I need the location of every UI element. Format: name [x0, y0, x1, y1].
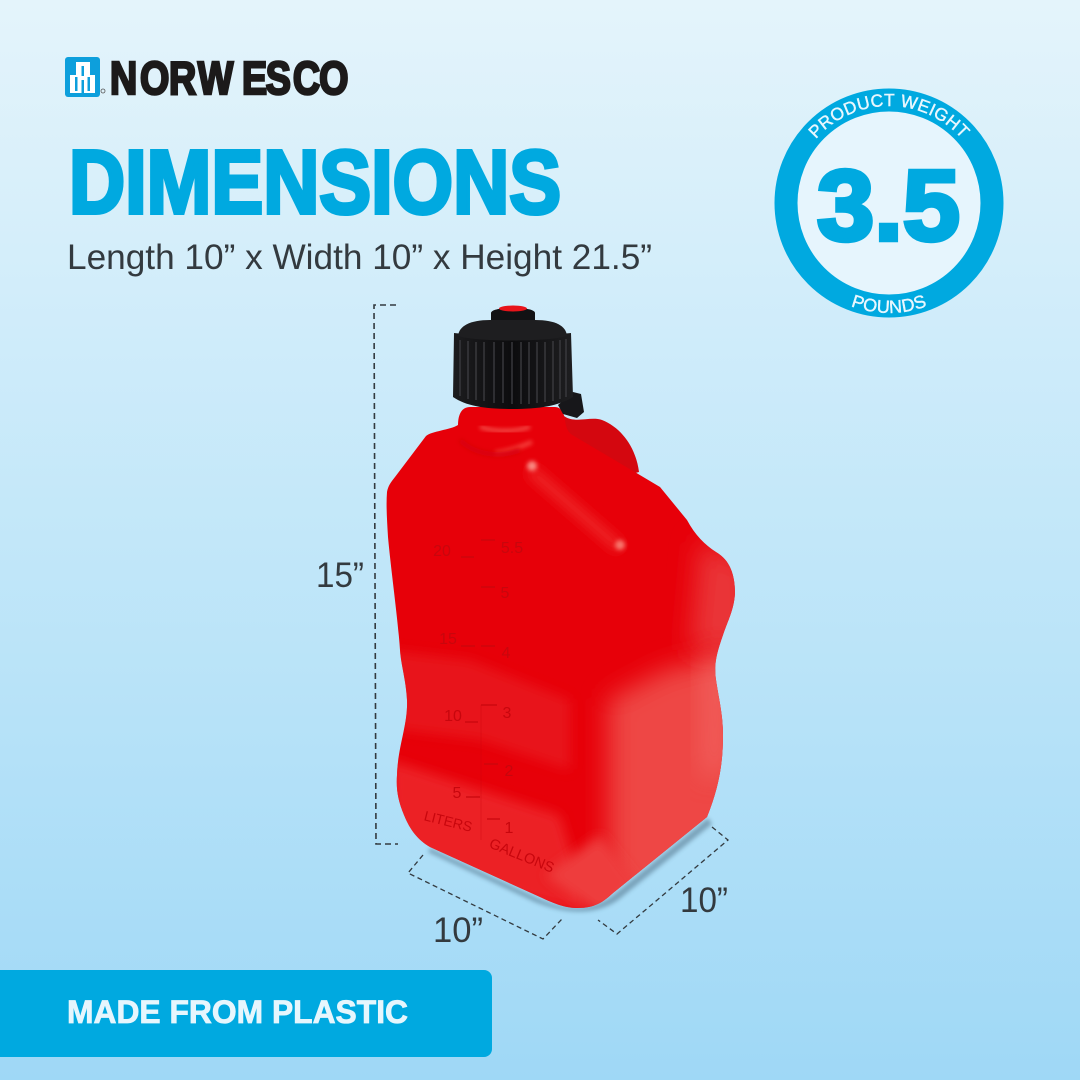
front waist band [400, 652, 570, 767]
jug measurement markings: 5 [501, 585, 510, 602]
subtitle: overall dimensions: Length 10” x Width 10” x Height 21.5” [67, 238, 652, 277]
side highlight [702, 650, 730, 780]
right side lower panel [593, 649, 723, 898]
jug measurement markings: 10 [444, 708, 462, 725]
cap latch [558, 392, 584, 418]
badge ring [786, 100, 992, 306]
jug measurement markings: GALLONS [487, 836, 556, 877]
jug measurement markings: 2 [505, 763, 514, 780]
callout text: MADE FROM PLASTIC [67, 994, 408, 1030]
dimension label: side width: 10” [680, 881, 728, 920]
cap top [458, 320, 567, 340]
badge unit label: POUNDS [852, 294, 926, 314]
jug measurement markings: 20 [433, 543, 451, 560]
bottom corner [548, 833, 634, 908]
dimension label: height: 15” [316, 556, 364, 595]
logo: Norwesco [65, 52, 348, 104]
jug measurement markings: 15 [439, 631, 457, 648]
jug measurement markings: 5.5 [501, 540, 523, 557]
neck highlight [480, 427, 530, 431]
dimension line: side width [598, 827, 728, 934]
logo wordmark: NORWESCO [110, 52, 348, 104]
product: red jug [380, 306, 750, 925]
jug measurement markings: LITERS [422, 807, 474, 835]
cap ribs [460, 339, 566, 404]
jug measurement markings: 1 [505, 820, 514, 837]
front bottom band [390, 760, 590, 915]
title: DIMENSIONS [69, 133, 561, 233]
jug measurement markings: 4 [502, 645, 511, 662]
jug handle [564, 416, 639, 480]
cap nozzle [491, 308, 535, 330]
cap nozzle red tip [499, 306, 527, 312]
neck shadow [460, 440, 520, 454]
badge top label: PRODUCT WEIGHT [808, 94, 971, 138]
jug measurement markings [422, 540, 556, 877]
jug measurement markings: 5 [453, 785, 462, 802]
icon: logo mark [65, 57, 105, 97]
callout: material bar [0, 970, 492, 1057]
right side upper panel [690, 540, 750, 650]
dimension line: height [374, 305, 398, 844]
badge value: 3.5 [817, 150, 960, 262]
badge: product weight [774, 88, 1004, 318]
cap skirt [453, 333, 573, 409]
dimension line: front width [408, 855, 562, 939]
shoulder ridge [530, 470, 620, 548]
jug body [386, 407, 735, 908]
jug measurement markings: 3 [503, 705, 512, 722]
jug ground shadow [428, 818, 712, 912]
callout bar [0, 970, 492, 1057]
dimension label: front width: 10” [433, 911, 483, 950]
